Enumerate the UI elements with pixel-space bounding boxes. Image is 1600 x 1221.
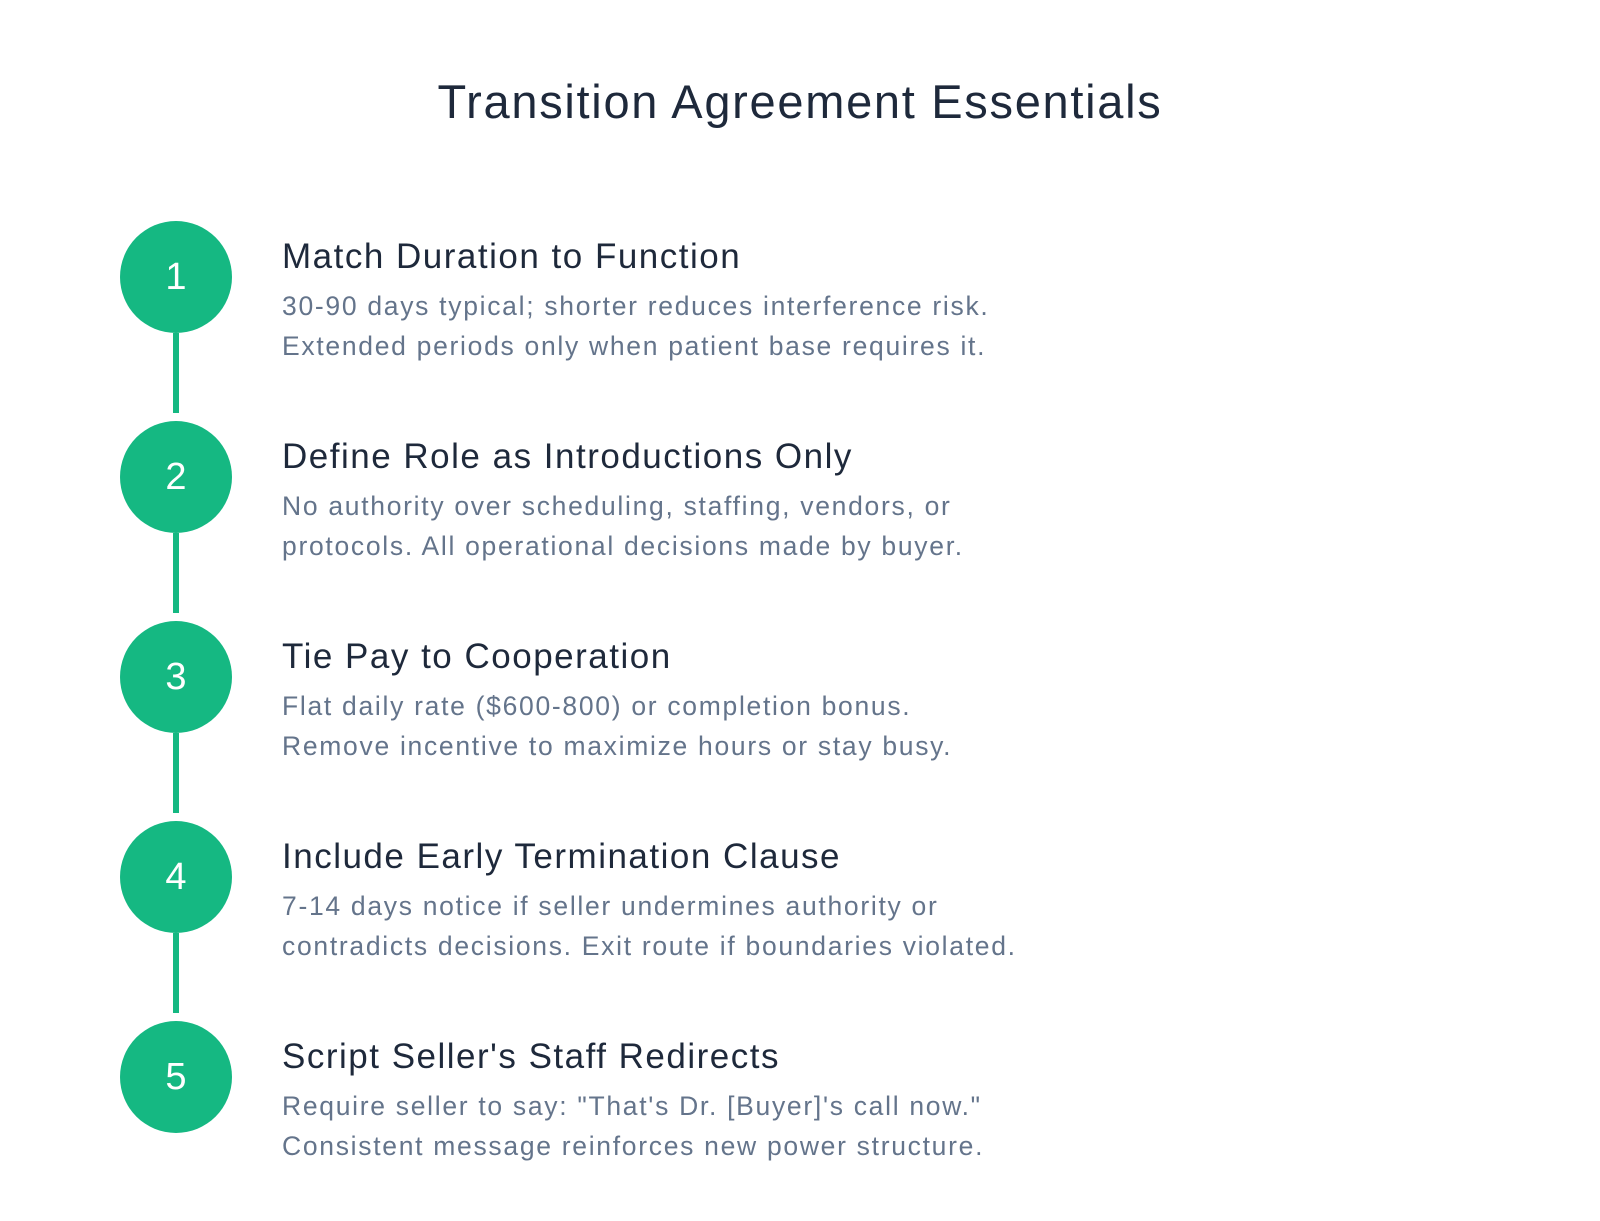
heading 1: Match Duration to Function xyxy=(282,237,741,276)
description 2 xyxy=(282,491,964,561)
circle 1 xyxy=(120,221,232,333)
description 4 xyxy=(282,891,1017,961)
circle 2 xyxy=(120,421,232,533)
description 4: contradicts decisions. Exit route if boundaries violated. xyxy=(282,931,1017,961)
heading 4: Include Early Termination Clause xyxy=(282,837,841,876)
description 1: Extended periods only when patient base requires it. xyxy=(282,331,986,361)
circle 3: 3 xyxy=(165,656,187,698)
connector 3 xyxy=(173,733,179,813)
description 3: Flat daily rate ($600-800) or completion bonus. xyxy=(282,691,911,721)
description 1: 30-90 days typical; shorter reduces interference risk. xyxy=(282,291,989,321)
description 3 xyxy=(282,691,952,761)
step 1 xyxy=(120,221,989,413)
step 2 xyxy=(120,421,964,613)
description 2: protocols. All operational decisions made by buyer. xyxy=(282,531,964,561)
circle 2: 2 xyxy=(165,456,187,498)
description 3: Remove incentive to maximize hours or stay busy. xyxy=(282,731,952,761)
step 5 xyxy=(120,1021,984,1161)
step 4 xyxy=(120,821,1017,1013)
description 5 xyxy=(282,1091,984,1161)
description 2: No authority over scheduling, staffing, vendors, or xyxy=(282,491,952,521)
connector 1 xyxy=(173,333,179,413)
circle 4: 4 xyxy=(165,856,187,898)
connector 4 xyxy=(173,933,179,1013)
description 4: 7-14 days notice if seller undermines authority or xyxy=(282,891,939,921)
description 5: Consistent message reinforces new power structure. xyxy=(282,1131,984,1161)
title: Transition Agreement Essentials xyxy=(438,75,1162,128)
heading 3: Tie Pay to Cooperation xyxy=(282,637,672,676)
circle 5 xyxy=(120,1021,232,1133)
description 5: Require seller to say: "That's Dr. [Buyer]'s call now." xyxy=(282,1091,982,1121)
connector 2 xyxy=(173,533,179,613)
step 3 xyxy=(120,621,952,813)
circle 3 xyxy=(120,621,232,733)
circle 4 xyxy=(120,821,232,933)
circle 1: 1 xyxy=(165,256,187,298)
description 1 xyxy=(282,291,989,361)
heading 2: Define Role as Introductions Only xyxy=(282,437,853,476)
heading 5: Script Seller's Staff Redirects xyxy=(282,1037,780,1076)
circle 5: 5 xyxy=(165,1056,187,1098)
